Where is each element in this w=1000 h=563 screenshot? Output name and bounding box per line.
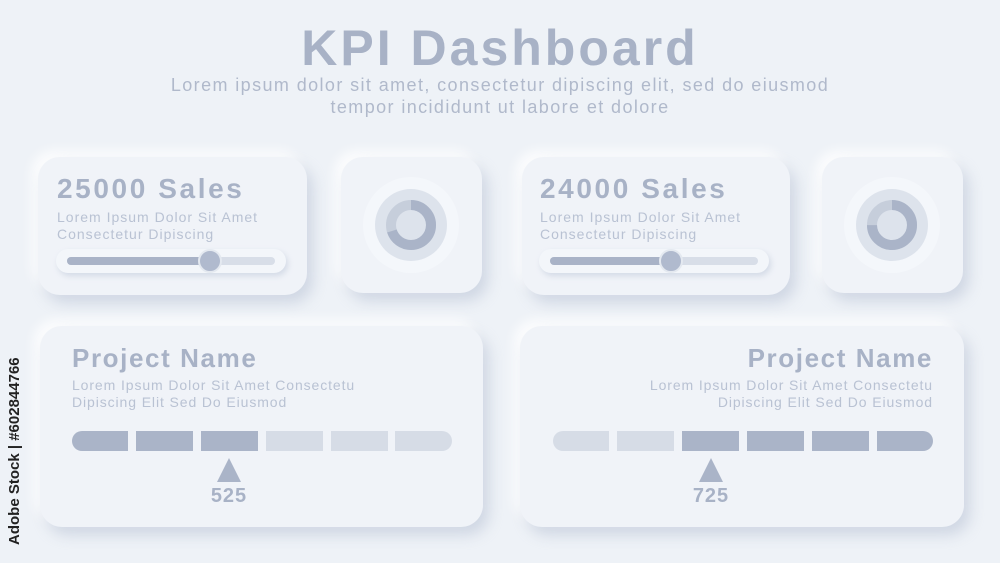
heading: 24000 Sales [540,173,727,204]
marker 725: 725 [693,485,729,507]
heading: Project Name [72,343,257,373]
slider [56,249,286,273]
icon: donut [375,189,447,261]
subtitle [171,75,829,117]
progress bar 2 [553,431,933,451]
watermark vertical text: Adobe Stock | #602844766 [6,357,23,545]
text: Consectetur Dipiscing [540,226,697,242]
text [72,377,355,410]
text: Lorem Ipsum Dolor Sit Amet [57,209,258,225]
text: Lorem Ipsum Dolor Sit Amet Consectetu [650,377,933,393]
text [540,209,741,242]
text: Lorem Ipsum Dolor Sit Amet [540,209,741,225]
marker 725 [693,458,729,507]
heading: Project Name [748,343,933,373]
panel: project 2 [520,326,964,527]
heading: 25000 Sales [57,173,244,204]
text: Consectetur Dipiscing [57,226,214,242]
panel: donut 2 [822,157,963,293]
text: Dipiscing Elit Sed Do Eiusmod [718,394,933,410]
icon: donut [856,189,928,261]
text: Lorem Ipsum Dolor Sit Amet Consectetu [72,377,355,393]
text [650,377,933,410]
panel: sales 2 [522,157,790,295]
marker 525 [211,458,247,507]
panel: donut 1 [341,157,482,293]
title: KPI Dashboard [301,20,699,76]
text [57,209,258,242]
panel: sales 1 [38,157,307,295]
text: Dipiscing Elit Sed Do Eiusmod [72,394,287,410]
marker 525: 525 [211,485,247,507]
progress bar 1 [72,431,452,451]
panel: project 1 [40,326,483,527]
slider [539,249,769,273]
subtitle: tempor incididunt ut labore et dolore [330,97,669,117]
subtitle: Lorem ipsum dolor sit amet, consectetur dipiscing elit, sed do eiusmod [171,75,829,95]
